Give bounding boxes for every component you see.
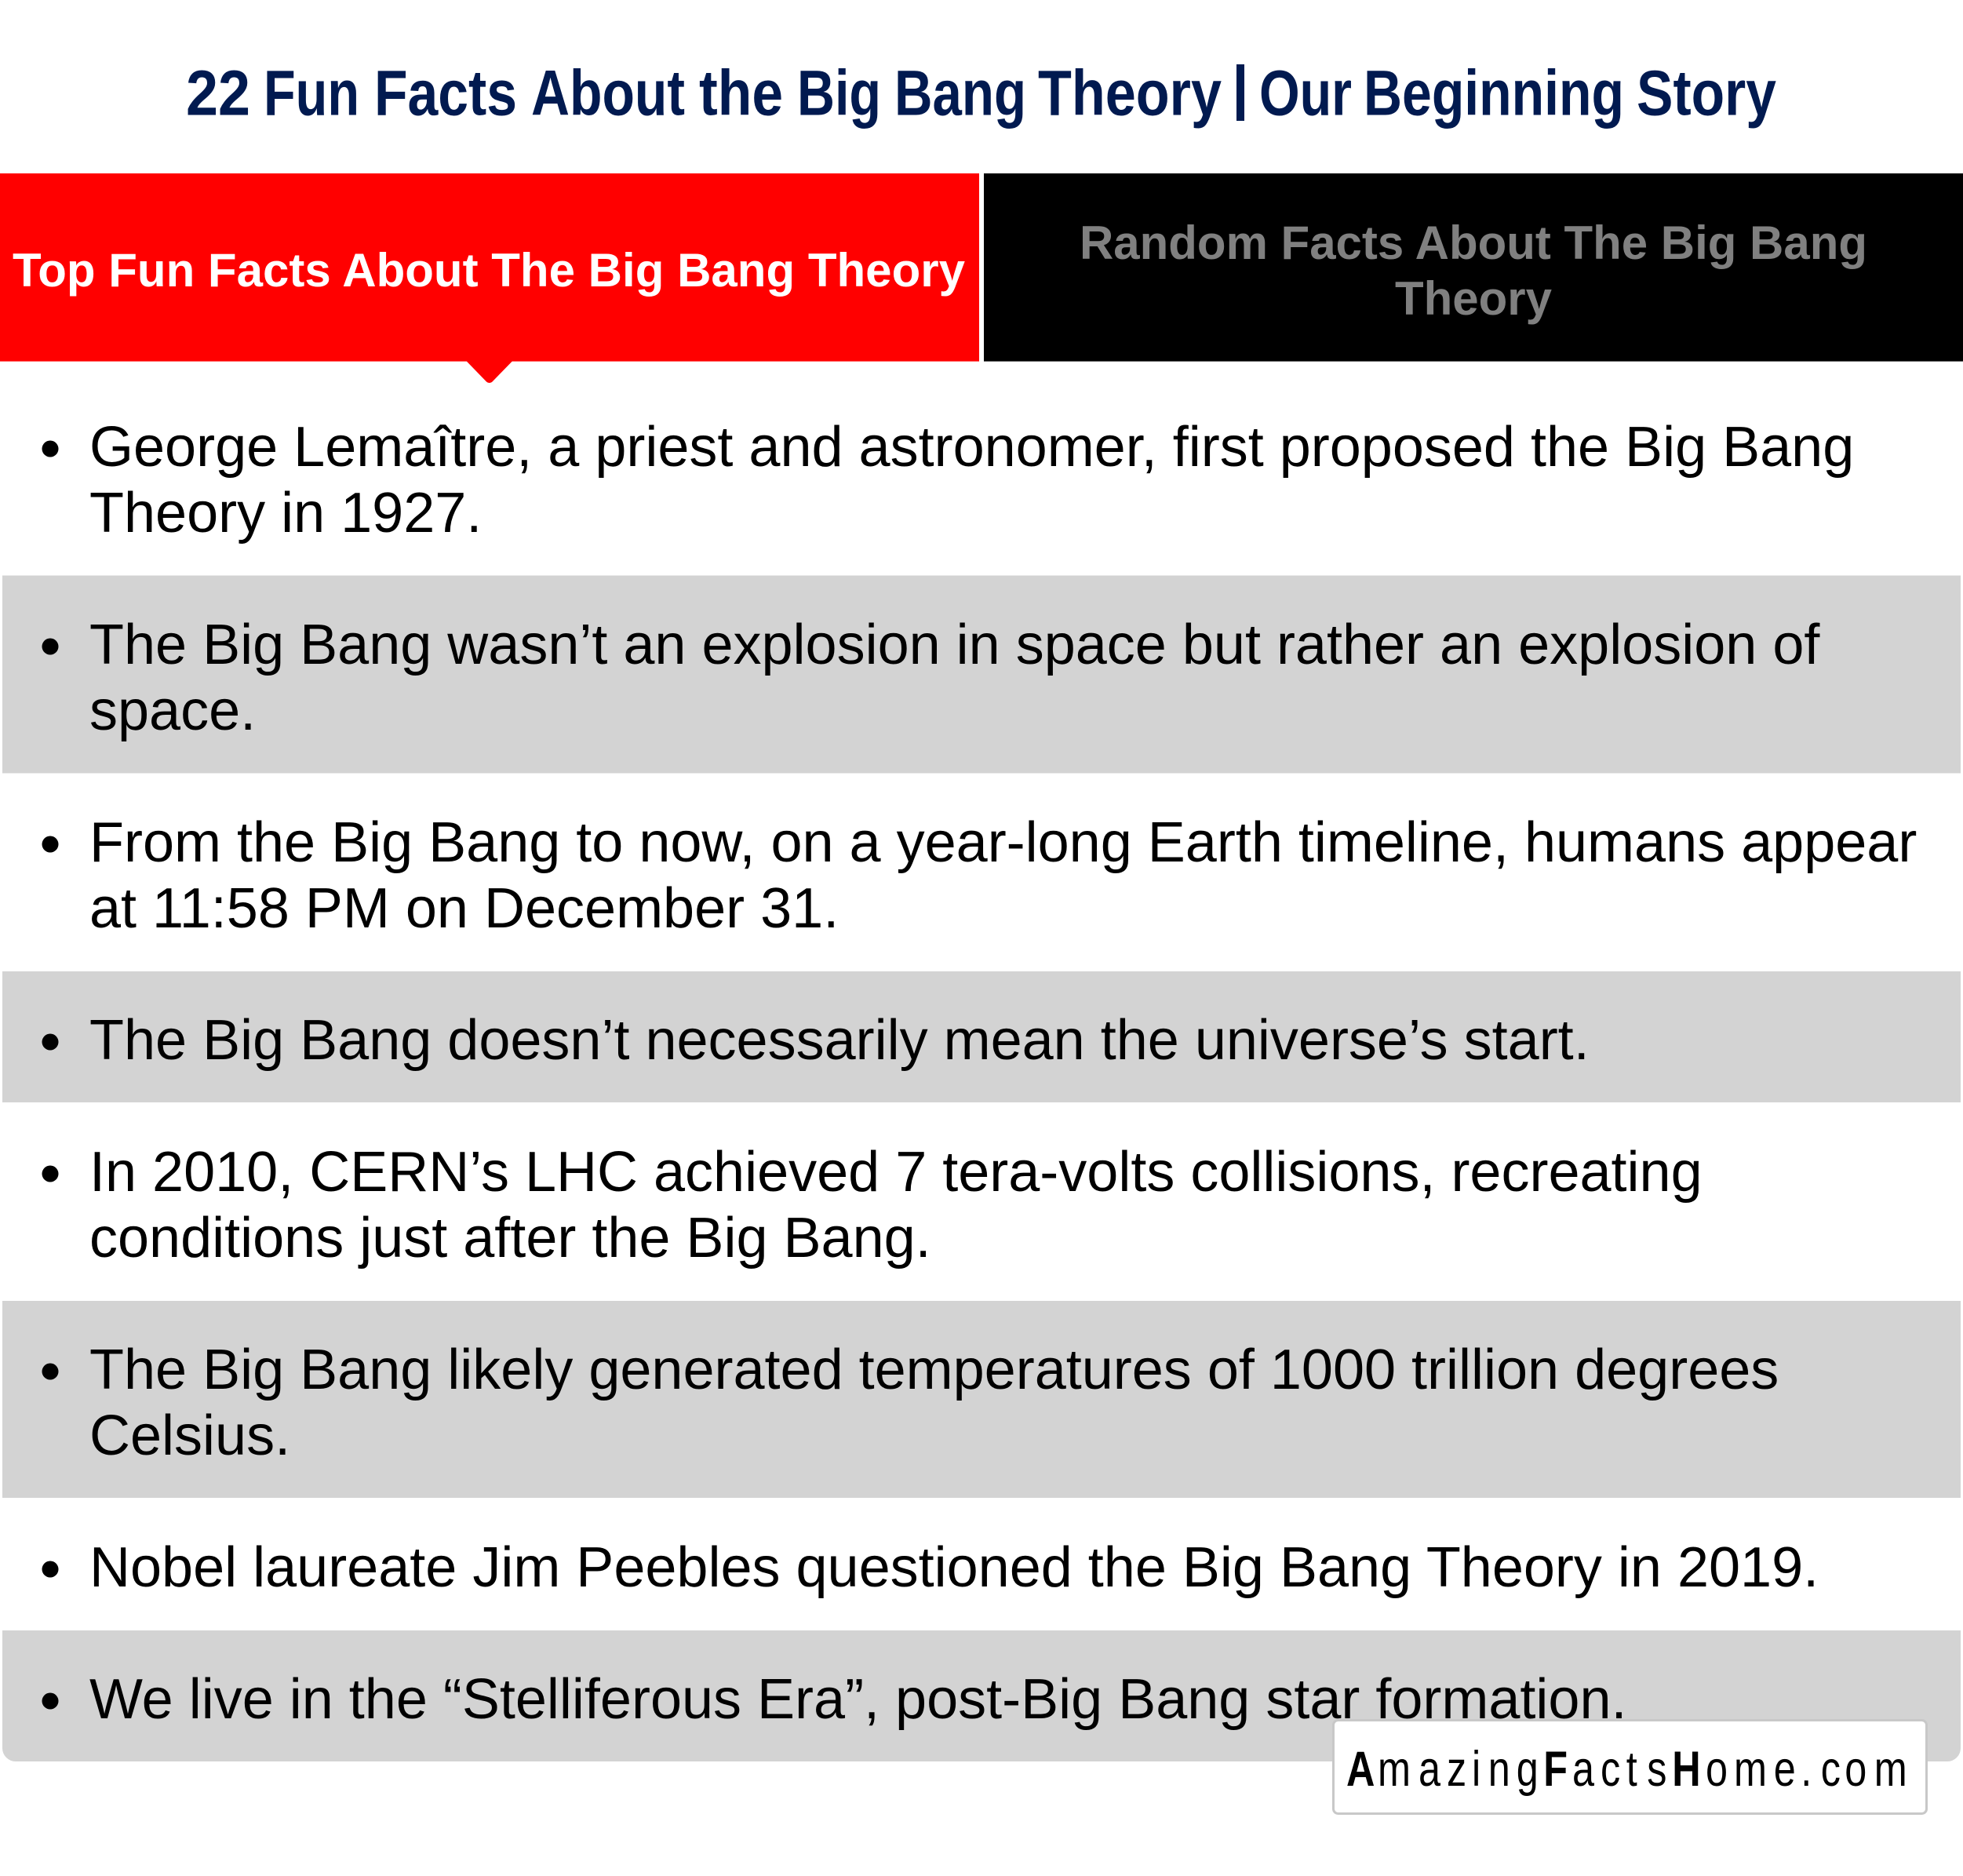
fact 5: In 2010, CERN’s LHC achieved 7 tera-volts collisions, recreating: [89, 1141, 1703, 1204]
inactive tab: random facts: Theory: [1395, 272, 1553, 325]
title: Big: [797, 58, 881, 129]
title: 22: [186, 58, 250, 129]
fact 1: George Lemaître, a priest and astronomer, first proposed the Big Bang: [89, 416, 1854, 479]
fact 5: [42, 1141, 1703, 1269]
inactive tab: random facts: Random Facts About The Big Bang: [1080, 217, 1867, 269]
fact 2: The Big Bang wasn’t an explosion in space but rather an explosion of: [89, 614, 1820, 676]
title: Fun: [264, 58, 359, 129]
watermark badge: A: [1346, 1742, 1375, 1797]
title: the: [699, 58, 783, 129]
fact 4: The Big Bang doesn’t necessarily mean the universe’s start.: [89, 1009, 1590, 1072]
fact 2: space.: [89, 679, 256, 742]
fact 1: [42, 416, 1854, 545]
fact 8: We live in the “Stelliferous Era”, post-Big Bang star formation.: [89, 1668, 1627, 1731]
fact 1: Theory in 1927.: [89, 482, 482, 545]
fact 8: [2, 1630, 1961, 1761]
title: Bang: [894, 58, 1026, 129]
fact 5: conditions just after the Big Bang.: [89, 1207, 931, 1269]
title: Facts: [374, 58, 517, 129]
fact 6: The Big Bang likely generated temperatures of 1000 trillion degrees: [89, 1339, 1779, 1401]
active tab: top fun facts: Top Fun Facts About The Big Bang Theory: [13, 244, 966, 297]
watermark badge: [1334, 1720, 1927, 1814]
fact 2: [2, 576, 1961, 774]
watermark badge: mazing: [1378, 1742, 1539, 1797]
fact 3: From the Big Bang to now, on a year-long Earth timeline, humans appear: [89, 811, 1917, 874]
watermark badge: acts: [1572, 1742, 1666, 1797]
title: About: [531, 58, 685, 129]
fact 7: Nobel laureate Jim Peebles questioned the Big Bang Theory in 2019.: [89, 1536, 1819, 1599]
title: Beginning: [1364, 58, 1624, 129]
title: Our: [1259, 58, 1352, 129]
watermark badge: ome.com: [1706, 1742, 1907, 1797]
fact 6: Celsius.: [89, 1404, 290, 1467]
title: Theory: [1038, 58, 1222, 129]
active tab: top fun facts: [0, 173, 979, 383]
watermark badge: H: [1672, 1742, 1701, 1797]
inactive tab: random facts: [984, 173, 1963, 362]
title: Story: [1637, 58, 1776, 129]
watermark badge: F: [1543, 1742, 1568, 1797]
fact 6: [2, 1301, 1961, 1498]
fact 4: [2, 971, 1961, 1102]
fact 3: at 11:58 PM on December 31.: [89, 877, 839, 940]
fact 3: [42, 811, 1917, 940]
title: [186, 58, 1776, 129]
